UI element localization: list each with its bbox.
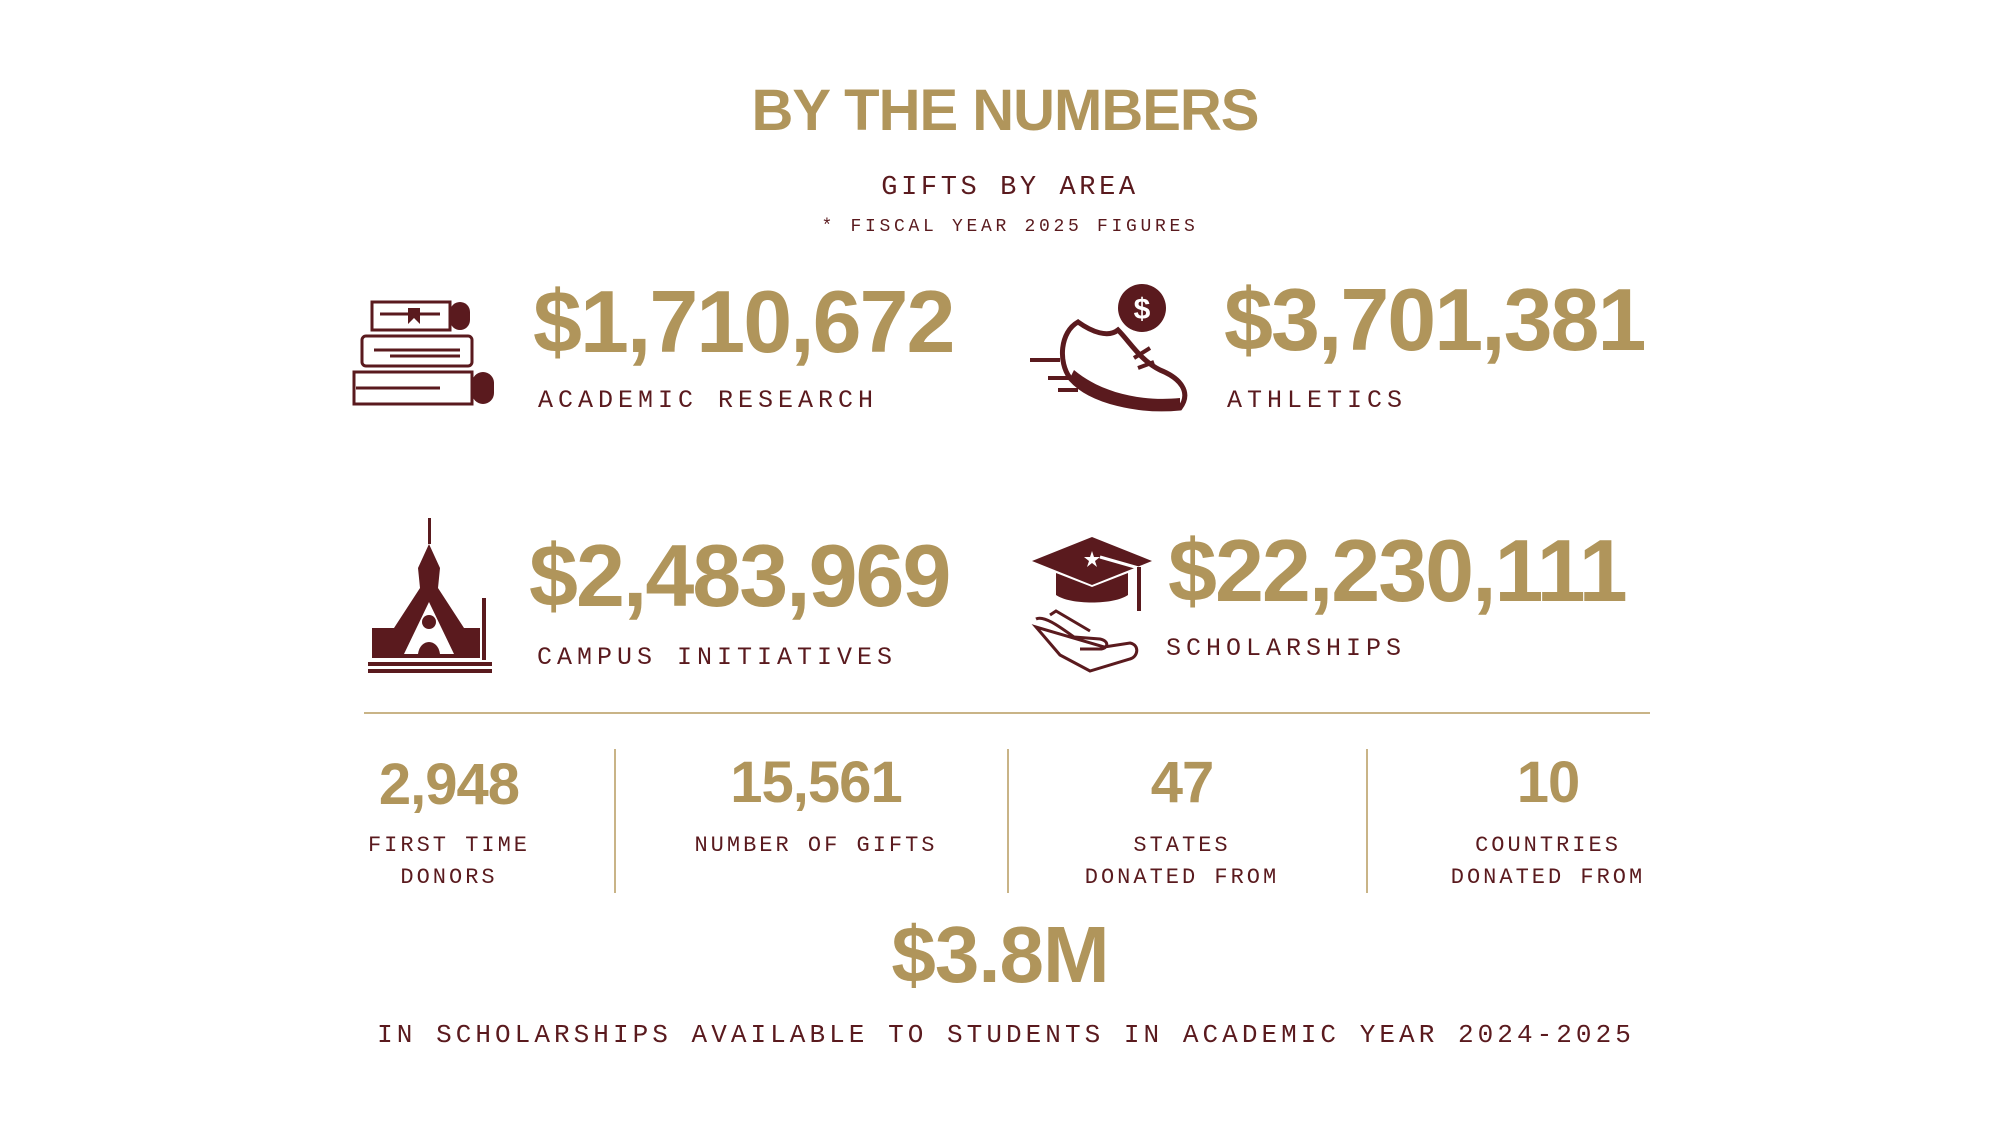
stat: countries: DONATED FROM xyxy=(1451,865,1645,890)
stat: number of gifts: 15,561 xyxy=(730,750,902,815)
highlight caption: IN SCHOLARSHIPS AVAILABLE TO STUDENTS IN ACADEMIC YEAR 2024-2025 xyxy=(377,1020,1635,1050)
divider xyxy=(364,712,1650,714)
amount: academic research: $1,710,672 xyxy=(533,272,953,371)
stat: first time donors: FIRST TIME xyxy=(368,833,530,858)
stat: states xyxy=(1085,750,1279,890)
icon: campus building xyxy=(368,518,492,673)
stat: number of gifts: NUMBER OF GIFTS xyxy=(694,833,938,858)
stat: states: STATES xyxy=(1133,833,1231,858)
title: BY THE NUMBERS xyxy=(752,78,1258,143)
amount: scholarships: $22,230,111 xyxy=(1168,521,1626,620)
amount: campus initiatives: $2,483,969 xyxy=(529,526,949,625)
stat: states: DONATED FROM xyxy=(1085,865,1279,890)
icon: shoe with coin xyxy=(1030,284,1188,412)
stat: countries: 10 xyxy=(1517,750,1579,815)
icon: grad cap and hand xyxy=(1032,537,1152,673)
highlight amount: $3.8M xyxy=(891,910,1109,999)
stat: first time donors: 2,948 xyxy=(379,752,519,817)
label: academic research: ACADEMIC RESEARCH xyxy=(538,386,878,415)
amount: athletics: $3,701,381 xyxy=(1224,270,1644,369)
stat: countries xyxy=(1451,750,1645,890)
stat: number of gifts xyxy=(694,750,938,858)
stat: first time donors xyxy=(368,752,530,890)
label: campus initiatives: CAMPUS INITIATIVES xyxy=(537,643,897,672)
subtitle: GIFTS BY AREA xyxy=(881,173,1139,203)
stat: first time donors: DONORS xyxy=(400,865,498,890)
label: scholarships: SCHOLARSHIPS xyxy=(1166,634,1406,663)
stat: countries: COUNTRIES xyxy=(1475,833,1621,858)
stat: states: 47 xyxy=(1151,750,1213,815)
icon: books xyxy=(352,300,494,406)
note: * FISCAL YEAR 2025 FIGURES xyxy=(821,217,1199,237)
icon: shoe with coin: $ xyxy=(1134,293,1151,326)
label: athletics: ATHLETICS xyxy=(1227,386,1407,415)
